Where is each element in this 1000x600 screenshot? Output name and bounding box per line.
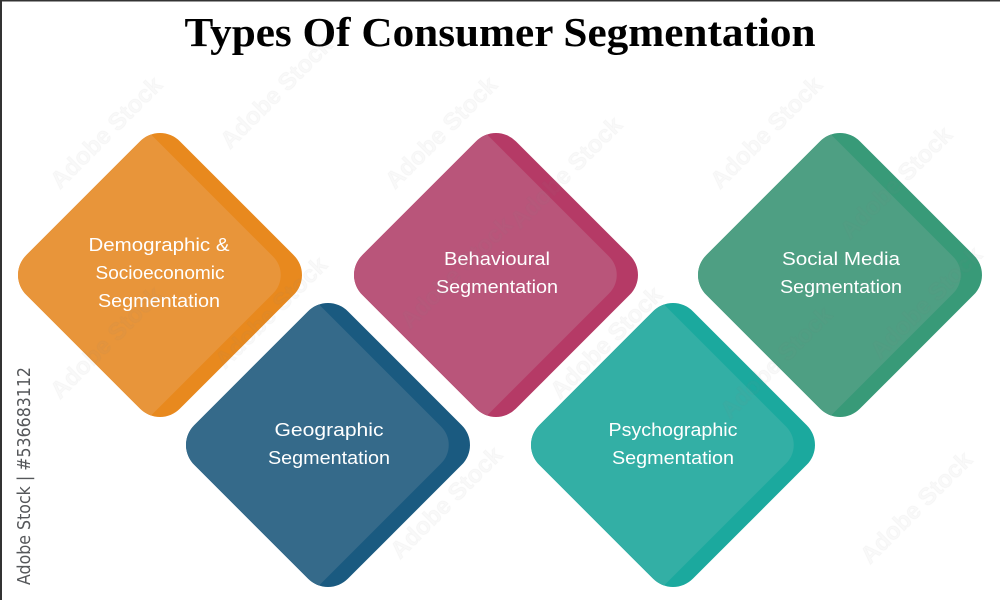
watermark pattern: Adobe Stock bbox=[865, 241, 988, 364]
watermark pattern: Adobe Stock bbox=[45, 71, 168, 194]
watermark pattern: Adobe Stock bbox=[380, 71, 503, 194]
label: segmentation 5: Segmentation bbox=[612, 447, 734, 468]
watermark pattern: Adobe Stock bbox=[210, 251, 333, 374]
label: behavioural: Behavioural bbox=[444, 248, 550, 269]
label: segmentation 4: Segmentation bbox=[268, 447, 390, 468]
watermark pattern: Adobe Stock bbox=[505, 111, 628, 234]
label: psychographic: Psychographic bbox=[608, 419, 738, 440]
diamond: behavioural segmentation bbox=[342, 121, 650, 429]
watermark pattern: Adobe Stock bbox=[705, 71, 828, 194]
label: demographic: Demographic & bbox=[88, 234, 230, 255]
diamond: social media segmentation bbox=[686, 121, 994, 429]
watermark pattern: Adobe Stock bbox=[545, 281, 668, 404]
watermark pattern: Adobe Stock bbox=[835, 121, 958, 244]
watermark pattern: Adobe Stock bbox=[215, 31, 338, 154]
label: socioeconomic: Socioeconomic bbox=[96, 262, 224, 283]
diamond: geographic segmentation bbox=[174, 291, 482, 599]
diamond: psychographic segmentation bbox=[519, 291, 827, 599]
watermark pattern: Adobe Stock bbox=[855, 446, 978, 569]
label: geographic: Geographic bbox=[274, 419, 384, 440]
label: segmentation 3: Segmentation bbox=[780, 276, 902, 297]
label: social media: Social Media bbox=[782, 248, 901, 269]
watermark pattern: Adobe Stock bbox=[715, 301, 838, 424]
title: Types Of Consumer Segmentation bbox=[184, 9, 816, 55]
label: segmentation 1: Segmentation bbox=[98, 290, 220, 311]
watermark pattern: Adobe Stock bbox=[395, 211, 518, 334]
label: segmentation 2: Segmentation bbox=[436, 276, 558, 297]
watermark pattern: Adobe Stock bbox=[45, 281, 168, 404]
watermark: adobe stock id: Adobe Stock | #536683112 bbox=[14, 367, 35, 585]
diamond: demographic and socioeconomic segmentation bbox=[6, 121, 314, 429]
watermark pattern: Adobe Stock bbox=[385, 441, 508, 564]
